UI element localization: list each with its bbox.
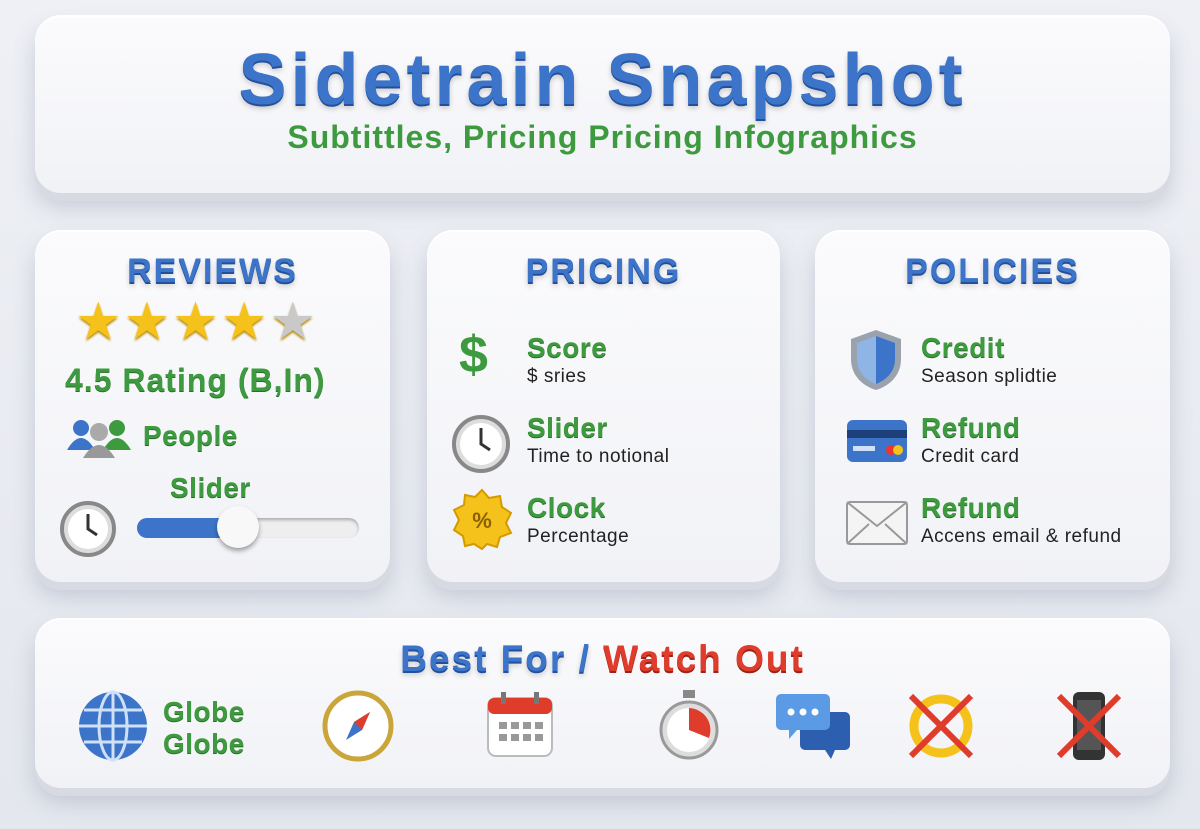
icon percent badge: % bbox=[472, 508, 492, 533]
icon globe bbox=[79, 690, 147, 762]
icon shield bbox=[851, 330, 901, 390]
icon stopwatch bbox=[660, 690, 718, 760]
globe label bbox=[163, 696, 245, 759]
people label: People bbox=[143, 420, 238, 451]
panel: policies bbox=[815, 230, 1170, 582]
panel: best for / watch out bbox=[35, 618, 1170, 788]
panel: pricing: Percentage bbox=[527, 526, 629, 547]
title: Sidetrain Snapshot bbox=[238, 40, 967, 120]
icon envelope bbox=[846, 501, 908, 545]
panel: policies: Accens email & refund bbox=[921, 526, 1122, 547]
icon crossed sync bbox=[908, 694, 974, 758]
icon dollar: $ bbox=[459, 326, 488, 384]
slider item: Slider bbox=[527, 412, 608, 443]
heading policies: POLICIES bbox=[905, 252, 1080, 290]
subtitle: Subtittles, Pricing Pricing Infographics bbox=[287, 119, 918, 155]
globe label: Globe bbox=[163, 728, 245, 759]
icon compass bbox=[322, 690, 394, 762]
icon percent badge bbox=[452, 488, 512, 550]
icon clock bbox=[60, 501, 116, 557]
icon card bbox=[847, 420, 907, 462]
globe label: Globe bbox=[163, 696, 245, 727]
panel: pricing: $ sries bbox=[527, 366, 586, 387]
icon clock bbox=[452, 415, 510, 473]
panel: pricing: Time to notional bbox=[527, 446, 669, 467]
title panel bbox=[35, 15, 1170, 193]
icon crossed phone bbox=[1056, 692, 1122, 760]
credit item: Credit bbox=[921, 332, 1005, 363]
panel: policies: Season splidtie bbox=[921, 366, 1057, 387]
clock item: Clock bbox=[527, 492, 606, 523]
slider label: Slider bbox=[170, 472, 251, 503]
icon people bbox=[67, 420, 131, 458]
refund item 2: Refund bbox=[921, 492, 1020, 523]
refund item: Refund bbox=[921, 412, 1020, 443]
icon calendar bbox=[487, 692, 553, 757]
score: Score bbox=[527, 332, 607, 363]
slider bbox=[137, 518, 359, 538]
panel: reviews bbox=[35, 230, 390, 582]
heading: Best For / Watch Out bbox=[400, 638, 805, 679]
panel: pricing bbox=[427, 230, 780, 582]
icon chat bbox=[776, 694, 850, 759]
heading pricing: PRICING bbox=[526, 252, 681, 290]
stars: ★★★★★ bbox=[75, 293, 318, 351]
heading reviews: REVIEWS bbox=[127, 252, 298, 290]
panel: policies: Credit card bbox=[921, 446, 1019, 467]
rating: 4.5 Rating (B,In) bbox=[65, 362, 326, 398]
